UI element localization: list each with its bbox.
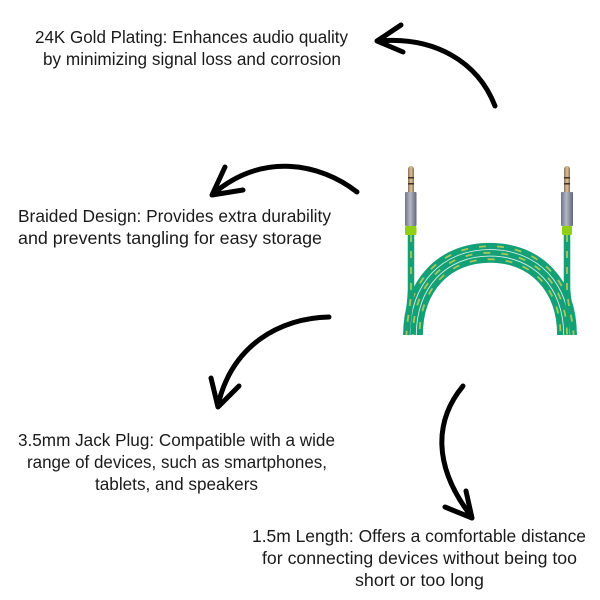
text block: 24K gold plating: by minimizing signal loss and corrosion — [43, 49, 341, 69]
cable: coiled braid — [406, 235, 574, 335]
text block: 3.5mm jack plug: tablets, and speakers — [95, 474, 258, 494]
text block: 1.5m length: for connecting devices without being too — [262, 548, 577, 568]
text block: 1.5m length: 1.5m Length: Offers a comfortable distance — [252, 526, 586, 546]
plug: right — [561, 166, 573, 235]
text block: 24K gold plating — [35, 27, 348, 69]
text block: braided design — [18, 206, 331, 248]
text block: 1.5m length: short or too long — [355, 570, 484, 590]
arrow: to length — [442, 386, 472, 518]
arrow: to jack plug — [211, 317, 329, 407]
text block: 3.5mm jack plug: 3.5mm Jack Plug: Compatible with a wide — [18, 430, 335, 450]
text block: 1.5m length — [252, 526, 586, 590]
text block: 3.5mm jack plug: range of devices, such as smartphones, — [27, 452, 327, 472]
text block: 3.5mm jack plug — [18, 430, 335, 494]
arrow: to braided design — [212, 166, 357, 195]
text block: braided design: Braided Design: Provides extra durability — [18, 206, 331, 226]
arrow: to gold plating — [377, 25, 495, 106]
text block: braided design: and prevents tangling for easy storage — [18, 228, 322, 248]
product image: green braided audio cable — [405, 166, 574, 335]
plug: left — [405, 166, 416, 235]
text block: 24K gold plating: 24K Gold Plating: Enhances audio quality — [35, 27, 348, 47]
